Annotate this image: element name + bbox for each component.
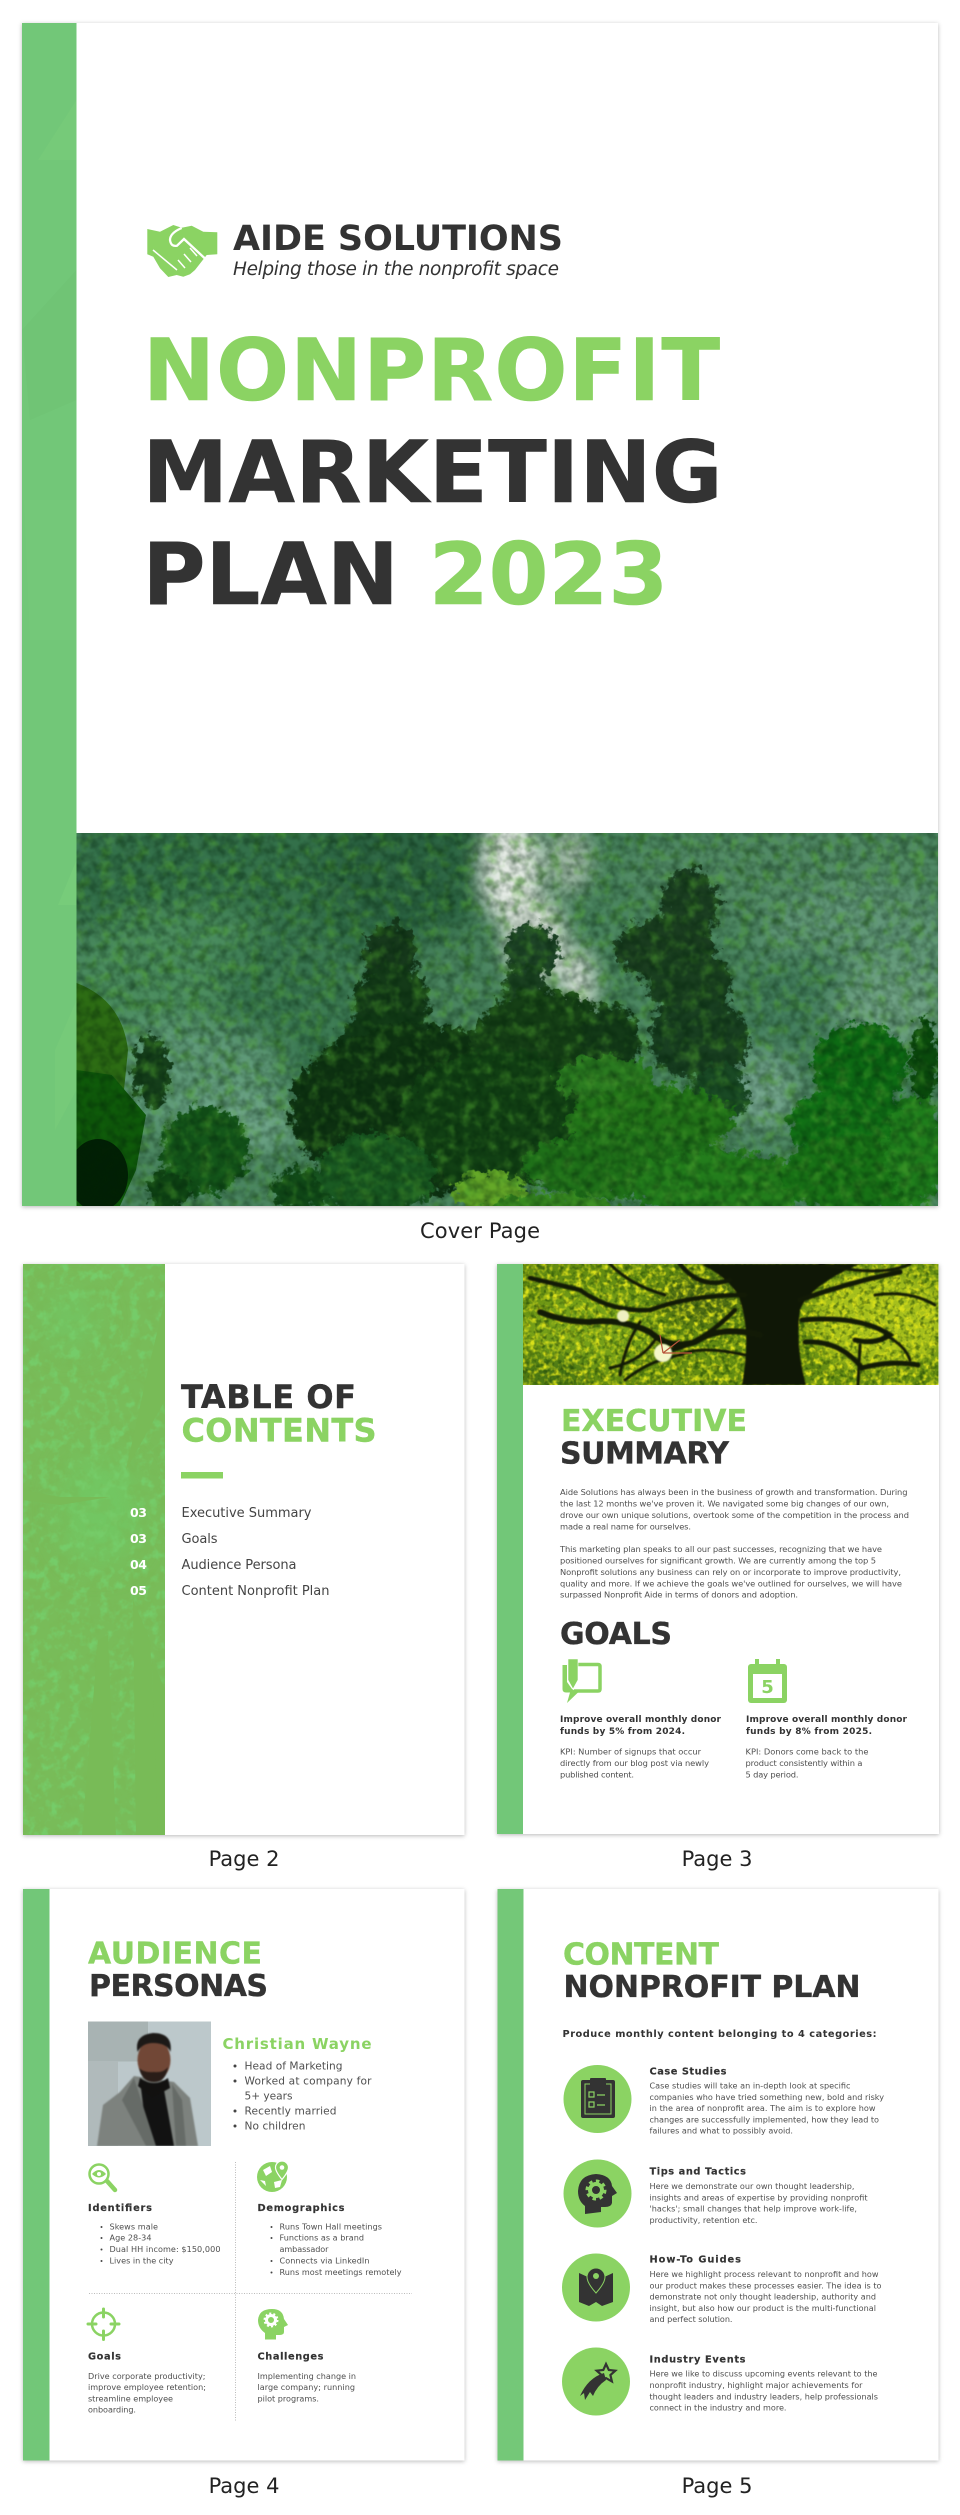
title: nonprofit marketing plan 2023: MARKETING xyxy=(142,423,722,523)
goals block: onboarding. xyxy=(88,2404,136,2414)
caption: page 4: Page 4 xyxy=(209,2474,279,2498)
challenges block: large company; running xyxy=(258,2382,355,2392)
demographics block: ambassador xyxy=(280,2244,329,2254)
identifiers block: Identifiers xyxy=(88,2203,152,2214)
contents list: 04 xyxy=(130,1557,147,1572)
goal 1 text: directly from our blog post via newly xyxy=(560,1758,709,1768)
identifiers block: Dual HH income: $150,000 xyxy=(110,2244,220,2254)
how-to guides text: and perfect solution. xyxy=(650,2314,732,2324)
demographics block: Runs Town Hall meetings xyxy=(280,2222,382,2232)
how-to guides text: demonstrate not only thought leadership, authority and xyxy=(650,2292,876,2302)
heading: table of contents: CONTENTS xyxy=(182,1412,376,1450)
heading: content nonprofit plan xyxy=(563,1938,860,2005)
contents list: Content Nonprofit Plan xyxy=(182,1584,330,1599)
icon: calendar 5: 5 xyxy=(761,1677,774,1698)
logo wordmark: AIDE SOLUTIONS xyxy=(233,219,563,259)
case studies text: Case Studies xyxy=(650,2066,727,2078)
challenges block: Challenges xyxy=(258,2352,324,2362)
goals block: Goals xyxy=(88,2352,121,2362)
contents list: Goals xyxy=(182,1532,218,1547)
case studies text: companies who have tried something new, bold and risky xyxy=(650,2092,884,2102)
goal 1 text xyxy=(560,1715,722,1780)
goal 2 text: product consistently within a xyxy=(746,1758,862,1768)
heading: content nonprofit plan: CONTENT xyxy=(563,1938,720,1972)
icon: head gear circle xyxy=(564,2160,632,2228)
challenges block: pilot programs. xyxy=(258,2394,319,2404)
industry events text: Industry Events xyxy=(650,2354,746,2366)
summary body text: the last 12 months we've proven it. We navigated some big changes of our own, xyxy=(560,1498,889,1508)
title: nonprofit marketing plan 2023: PLAN 2023 xyxy=(142,525,668,625)
heading: audience personas: PERSONAS xyxy=(89,1969,268,2004)
industry events text: Here we like to discuss upcoming events relevant to the xyxy=(650,2368,878,2378)
goal 1 text: published content. xyxy=(560,1770,634,1780)
heading: executive summary: EXECUTIVE xyxy=(561,1404,747,1439)
how-to guides text: Here we highlight process relevant to nonprofit and how xyxy=(650,2269,879,2279)
heading: table of contents: TABLE OF xyxy=(181,1378,356,1416)
summary body text xyxy=(559,1487,909,1600)
tips and tactics text: productivity, retention etc. xyxy=(650,2215,758,2225)
persona name and bullets xyxy=(222,2035,372,2132)
goals block xyxy=(88,2352,206,2414)
summary body text: Aide Solutions has always been in the business of growth and transformation. During xyxy=(560,1487,908,1497)
how-to guides text: How-To Guides xyxy=(650,2254,741,2266)
how-to guides text: insight, but also how our product is the multi-functional xyxy=(650,2303,876,2313)
icon: calendar 5 xyxy=(748,1659,787,1703)
side bar xyxy=(23,1889,50,2460)
demographics block: Connects via LinkedIn xyxy=(280,2256,370,2266)
title: nonprofit marketing plan 2023: NONPROFIT xyxy=(143,321,720,421)
logo wordmark xyxy=(233,219,563,280)
caption: page 3: Page 3 xyxy=(682,1847,752,1871)
demographics block xyxy=(258,2203,402,2277)
contents list xyxy=(130,1505,330,1599)
goals block: improve employee retention; xyxy=(88,2382,206,2392)
icon: magnifier eye xyxy=(90,2164,115,2190)
goal 2 text: KPI: Donors come back to the xyxy=(746,1746,868,1756)
summary body text: This marketing plan speaks to all our past successes, recognizing that we have xyxy=(559,1544,882,1554)
challenges block: Implementing change in xyxy=(258,2371,356,2381)
icon: clipboard circle xyxy=(564,2065,632,2133)
heading: audience personas xyxy=(88,1936,268,2004)
panel: cover page xyxy=(22,23,960,1237)
heading: executive summary xyxy=(560,1404,747,1472)
contents list: 03 xyxy=(130,1531,147,1546)
case studies text: changes are successfully implemented, how they lead to xyxy=(650,2114,879,2124)
icon: handshake logo xyxy=(147,225,217,277)
icon: globe pin xyxy=(257,2161,288,2192)
goal 2 text: 5 day period. xyxy=(746,1770,798,1780)
intro line: Produce monthly content belonging to 4 categories: xyxy=(562,2029,876,2040)
icon: target xyxy=(88,2309,119,2340)
goals block: Drive corporate productivity; xyxy=(88,2371,206,2381)
heading: table of contents xyxy=(181,1378,376,1450)
persona name and bullets: No children xyxy=(244,2120,306,2132)
case studies text: failures and what to possibly avoid. xyxy=(650,2126,793,2136)
photo: green forest canopy panel xyxy=(23,1264,165,1835)
persona name and bullets: Worked at company for xyxy=(244,2076,372,2088)
summary body text: drove our own unique solutions, overtook some of the competition in the process and xyxy=(560,1510,909,1520)
identifiers block: Age 28-34 xyxy=(110,2232,152,2242)
goal 2 text: funds by 8% from 2025. xyxy=(746,1727,872,1737)
icon: shooting star circle xyxy=(562,2348,630,2416)
identifiers block: Skews male xyxy=(110,2222,158,2232)
persona name and bullets: Head of Marketing xyxy=(244,2060,342,2072)
demographics block: Functions as a brand xyxy=(280,2232,364,2242)
photo: misty rainforest xyxy=(76,833,938,1206)
tips and tactics text xyxy=(650,2166,868,2225)
industry events text: nonprofit industry, highlight major achievements for xyxy=(650,2380,863,2390)
contents list: Audience Persona xyxy=(182,1558,296,1573)
icon: chat and pencil xyxy=(562,1659,600,1703)
caption: page 2: Page 2 xyxy=(209,1847,279,1871)
heading: goals: GOALS xyxy=(560,1617,672,1652)
persona name and bullets: Christian Wayne xyxy=(222,2035,372,2053)
panel: page 3 executive summary xyxy=(497,1264,950,1834)
tips and tactics text: 'hacks'; small changes that help improve work-life, xyxy=(650,2204,857,2214)
caption: cover page: Cover Page xyxy=(420,1219,540,1243)
panel: page 2 table of contents xyxy=(23,1264,464,1835)
industry events text: connect in the industry and more. xyxy=(650,2402,786,2412)
contents list: 05 xyxy=(130,1583,147,1598)
tips and tactics text: insights and areas of expertise by providing nonprofit xyxy=(650,2192,868,2202)
caption: page 5: Page 5 xyxy=(682,2474,752,2498)
demographics block: Demographics xyxy=(258,2203,345,2214)
tips and tactics text: Here we demonstrate our own thought leadership, xyxy=(650,2181,854,2191)
icon: head with gear xyxy=(258,2309,288,2340)
side bar xyxy=(498,1889,524,2460)
goals block: streamline employee xyxy=(88,2394,173,2404)
demographics block: Runs most meetings remotely xyxy=(280,2267,402,2277)
summary body text: surpassed Nonprofit Aide in terms of donors and adoption. xyxy=(560,1590,798,1600)
icon: map pin circle xyxy=(562,2254,630,2322)
heading: content nonprofit plan: NONPROFIT PLAN xyxy=(564,1970,860,2005)
goal 1 text: KPI: Number of signups that occur xyxy=(560,1746,702,1756)
case studies text xyxy=(650,2066,884,2136)
tips and tactics text: Tips and Tactics xyxy=(650,2166,746,2178)
title: nonprofit marketing plan 2023 xyxy=(142,321,722,625)
contents list: Executive Summary xyxy=(182,1506,312,1521)
persona name and bullets: Recently married xyxy=(244,2106,336,2118)
summary body text: positioned ourselves for significant growth. We are currently among the top 5 xyxy=(560,1556,876,1566)
case studies text: in the area of nonprofit area. The aim is to explore how xyxy=(650,2103,876,2113)
summary body text: quality and more. If we achieve the goals we've outlined for ourselves, we will have xyxy=(560,1578,902,1588)
industry events text xyxy=(650,2354,878,2412)
identifiers block: Lives in the city xyxy=(110,2256,174,2266)
heading: executive summary: SUMMARY xyxy=(560,1436,730,1472)
panel: page 4 audience personas xyxy=(23,1889,464,2460)
goal 1 text: Improve overall monthly donor xyxy=(560,1715,722,1725)
challenges block xyxy=(258,2352,356,2404)
how-to guides text: our product makes these processes easier. The idea is to xyxy=(650,2280,882,2290)
cover side bar xyxy=(22,23,76,1206)
side bar xyxy=(497,1264,523,1834)
photo: tree canopy xyxy=(523,1264,938,1385)
goal 2 text: Improve overall monthly donor xyxy=(746,1715,908,1725)
how-to guides text xyxy=(650,2254,882,2324)
logo wordmark: Helping those in the nonprofit space xyxy=(233,259,559,280)
summary body text: Nonprofit solutions any business can rely on or incorporate to improve productivity, xyxy=(560,1567,901,1577)
panel: page 5 content plan xyxy=(498,1889,938,2460)
divider bar xyxy=(181,1472,223,1478)
identifiers block xyxy=(88,2203,220,2266)
contents list: 03 xyxy=(130,1505,147,1520)
persona name and bullets: 5+ years xyxy=(244,2090,292,2102)
photo: persona portrait xyxy=(88,2022,211,2146)
heading: audience personas: AUDIENCE xyxy=(88,1936,262,1972)
case studies text: Case studies will take an in-depth look at specific xyxy=(650,2080,850,2090)
summary body text: made a real name for ourselves. xyxy=(560,1522,691,1532)
goal 1 text: funds by 5% from 2024. xyxy=(560,1727,685,1737)
industry events text: thought leaders and industry leaders, help professionals xyxy=(650,2392,878,2402)
goal 2 text xyxy=(746,1715,908,1780)
